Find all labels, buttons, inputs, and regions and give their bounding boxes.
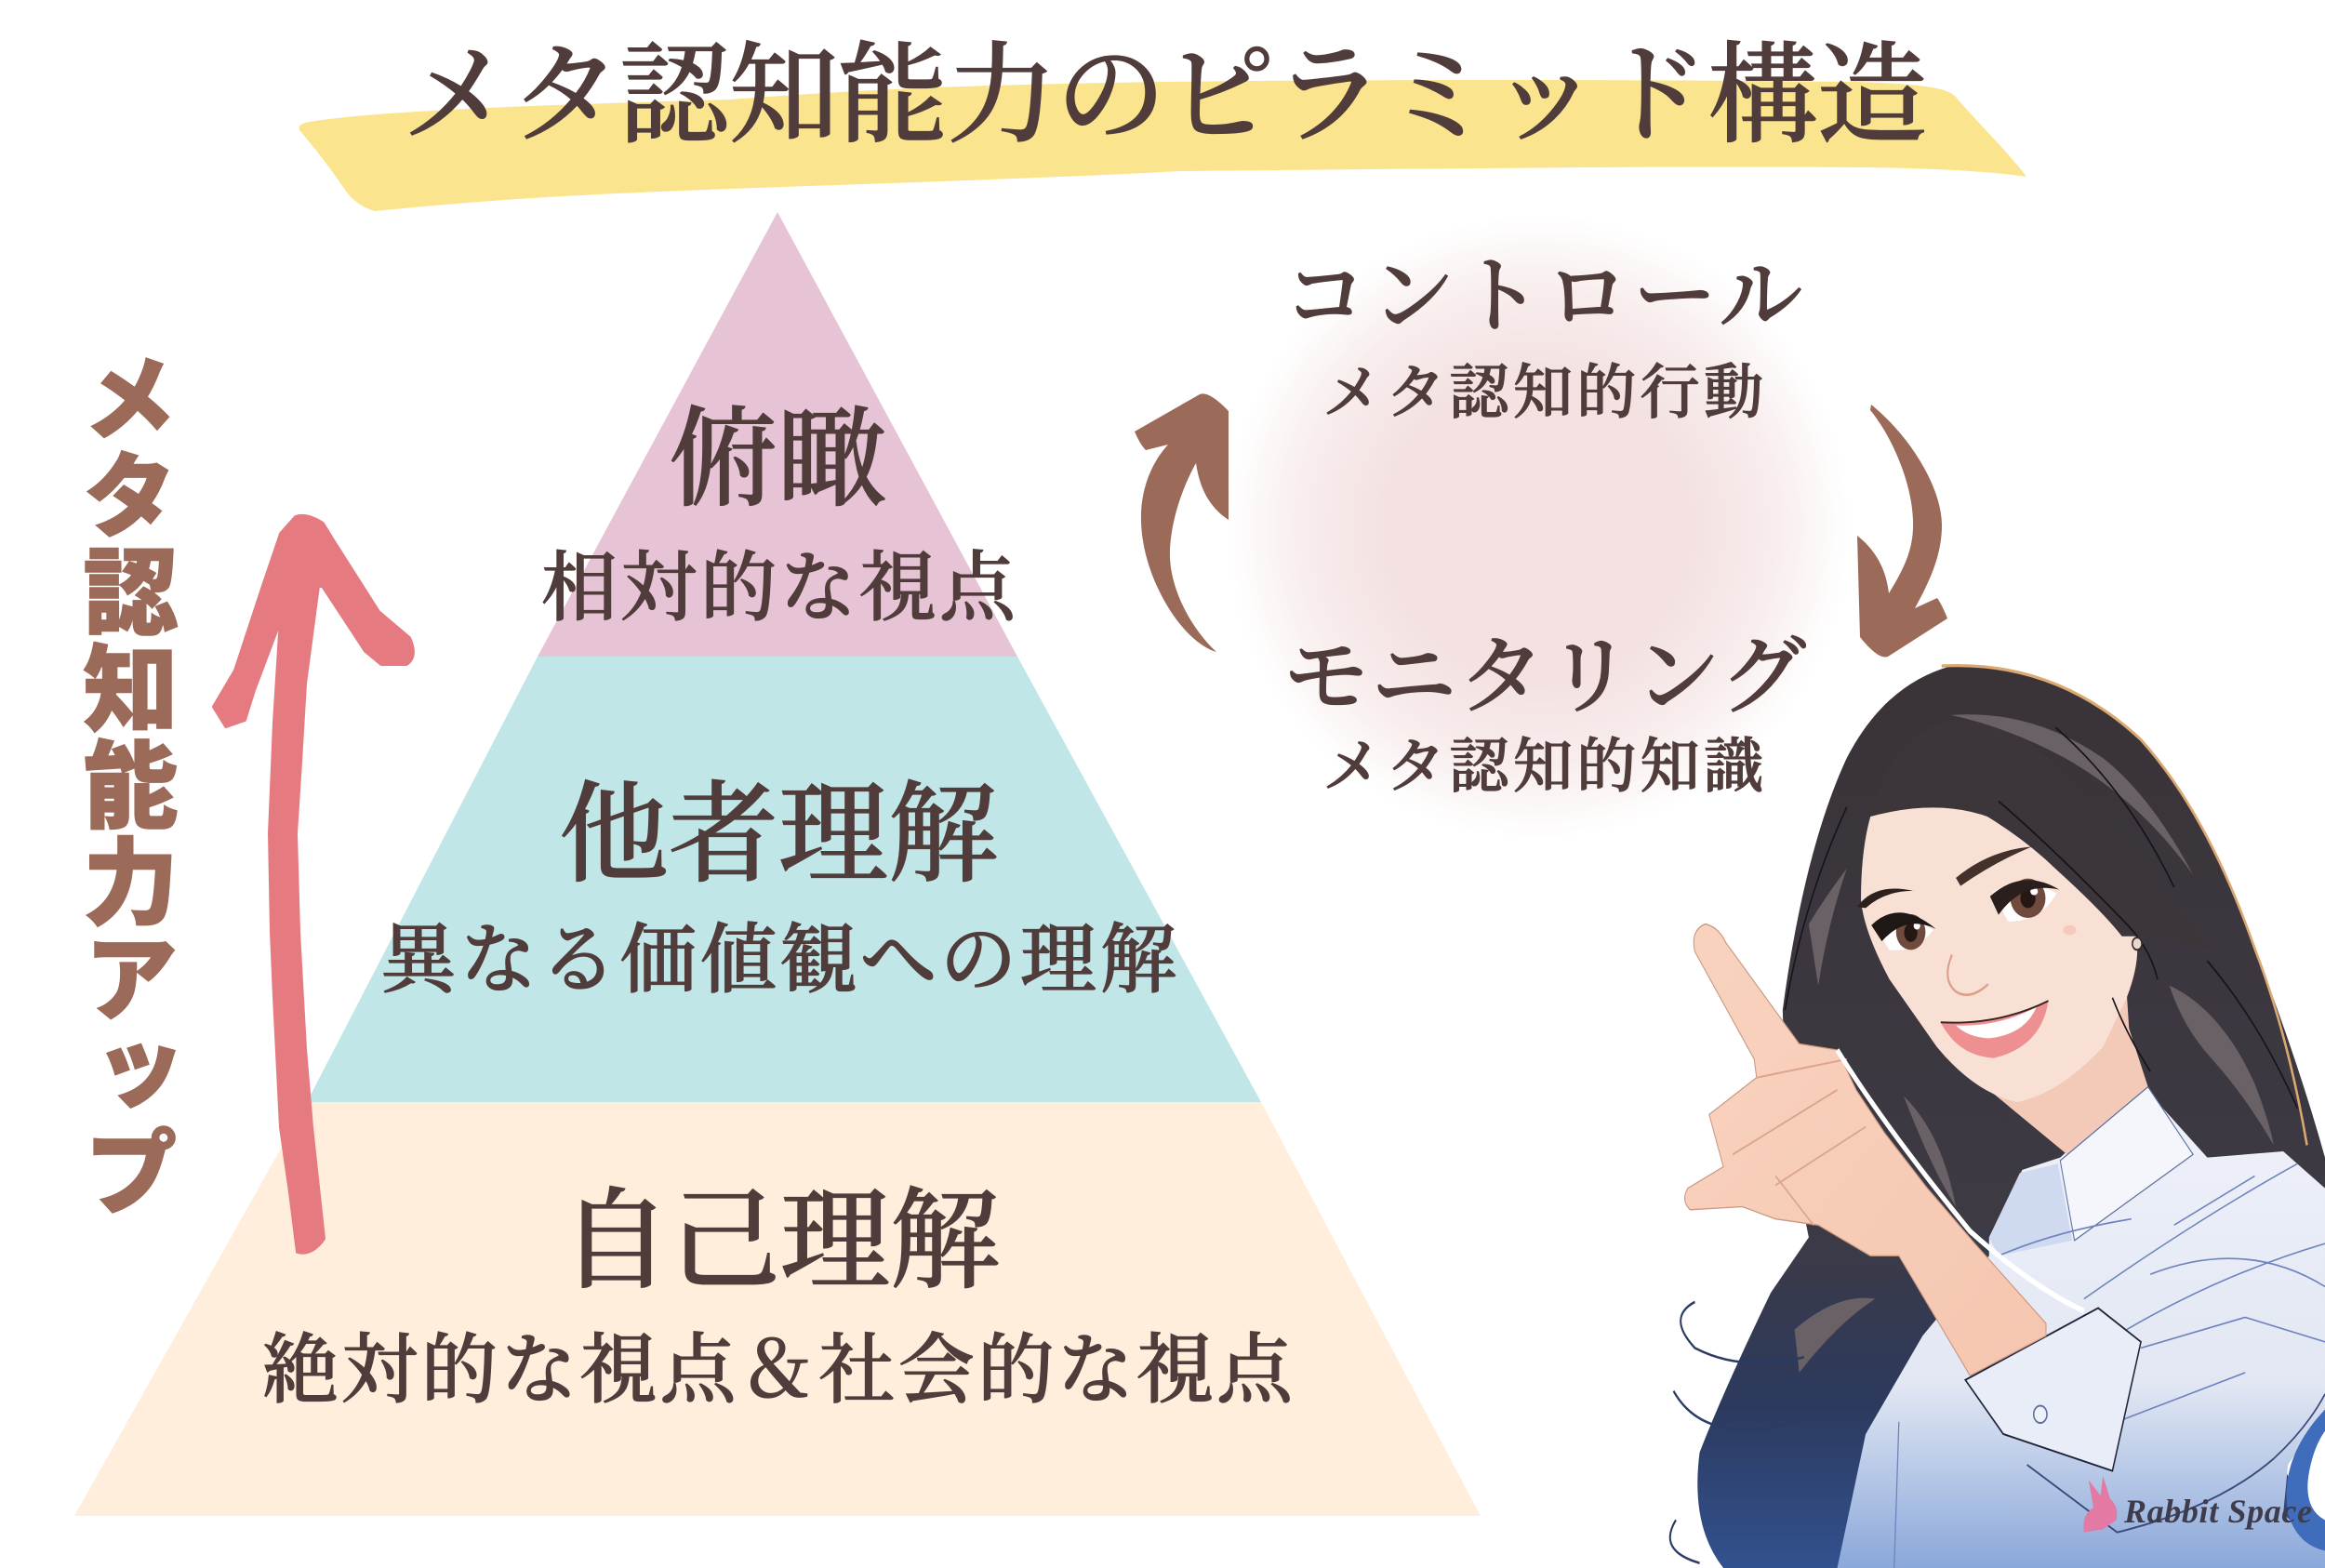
earring	[2132, 937, 2142, 950]
left eye	[1871, 912, 1936, 950]
cycle label: control: コントロール	[1283, 251, 1802, 343]
tier 3 subtext: 絶対的な視点＆社会的な視点	[262, 1328, 1295, 1413]
title highlight brush stroke	[299, 80, 2026, 211]
vertical label: メタ認知能力アップ	[70, 350, 177, 1220]
tier 1 heading: 俯瞰	[669, 401, 886, 521]
pyramid	[74, 212, 1481, 1516]
blue hair lock right	[2286, 1410, 2325, 1550]
hair strands	[1785, 727, 2297, 1109]
pyramid tier: top	[538, 212, 1017, 657]
tier 2 subtext: 異なる価値観への理解	[380, 918, 1176, 1003]
cycle diagram	[1135, 251, 1947, 800]
finger creases	[1733, 1059, 1866, 1225]
logo text: Rabbit Space	[2123, 1493, 2312, 1530]
collar	[2060, 1087, 2193, 1241]
tier 3 heading: 自己理解	[561, 1181, 1000, 1303]
hair rim light	[1942, 666, 2307, 1145]
hair	[1697, 666, 2325, 1568]
pyramid tier: bottom	[74, 1102, 1481, 1516]
arrow: brown upward left	[1135, 393, 1229, 652]
tier 2 heading: 他者理解	[559, 775, 998, 897]
cuff button	[2034, 1406, 2047, 1423]
cuff	[1965, 1309, 2141, 1471]
cheek blush mark	[2063, 925, 2077, 935]
tier 1 subtext: 相対的な視点	[541, 546, 1018, 631]
shirt	[1838, 1083, 2325, 1568]
arrow: brown downward right	[1857, 405, 1947, 658]
logo: rabbit	[2083, 1476, 2117, 1533]
hair wisps	[1670, 1302, 1804, 1563]
sleeve lower edge	[2027, 1394, 2325, 1533]
cycle sublabel: knowledge: メタ認知的知識	[1322, 734, 1763, 800]
pyramid tier: middle	[307, 657, 1261, 1102]
cycle label: monitoring: モニタリング	[1283, 630, 1806, 724]
hair over forehead	[1870, 720, 2212, 949]
cycle glow background	[1227, 216, 1850, 839]
sleeve stripes	[1894, 1163, 2325, 1568]
cycle sublabel: behavior: メタ認知的行動	[1322, 360, 1763, 426]
arrow: pink upward	[214, 516, 413, 1253]
neck	[1989, 955, 2148, 1161]
collar left	[1989, 1163, 2072, 1256]
mouth	[1941, 1001, 2049, 1058]
nose	[1947, 955, 1988, 995]
hair highlights	[1795, 714, 2274, 1373]
face	[1861, 794, 2137, 1102]
title: メタ認知能力のピラミッド構造	[402, 35, 1927, 157]
right eyebrow	[1956, 846, 2032, 886]
right eye	[1990, 879, 2059, 922]
character illustration	[1670, 666, 2325, 1568]
arm highlight	[1838, 1050, 2084, 1311]
left eyebrow	[1857, 888, 1913, 908]
hand and forearm	[1685, 924, 2046, 1375]
